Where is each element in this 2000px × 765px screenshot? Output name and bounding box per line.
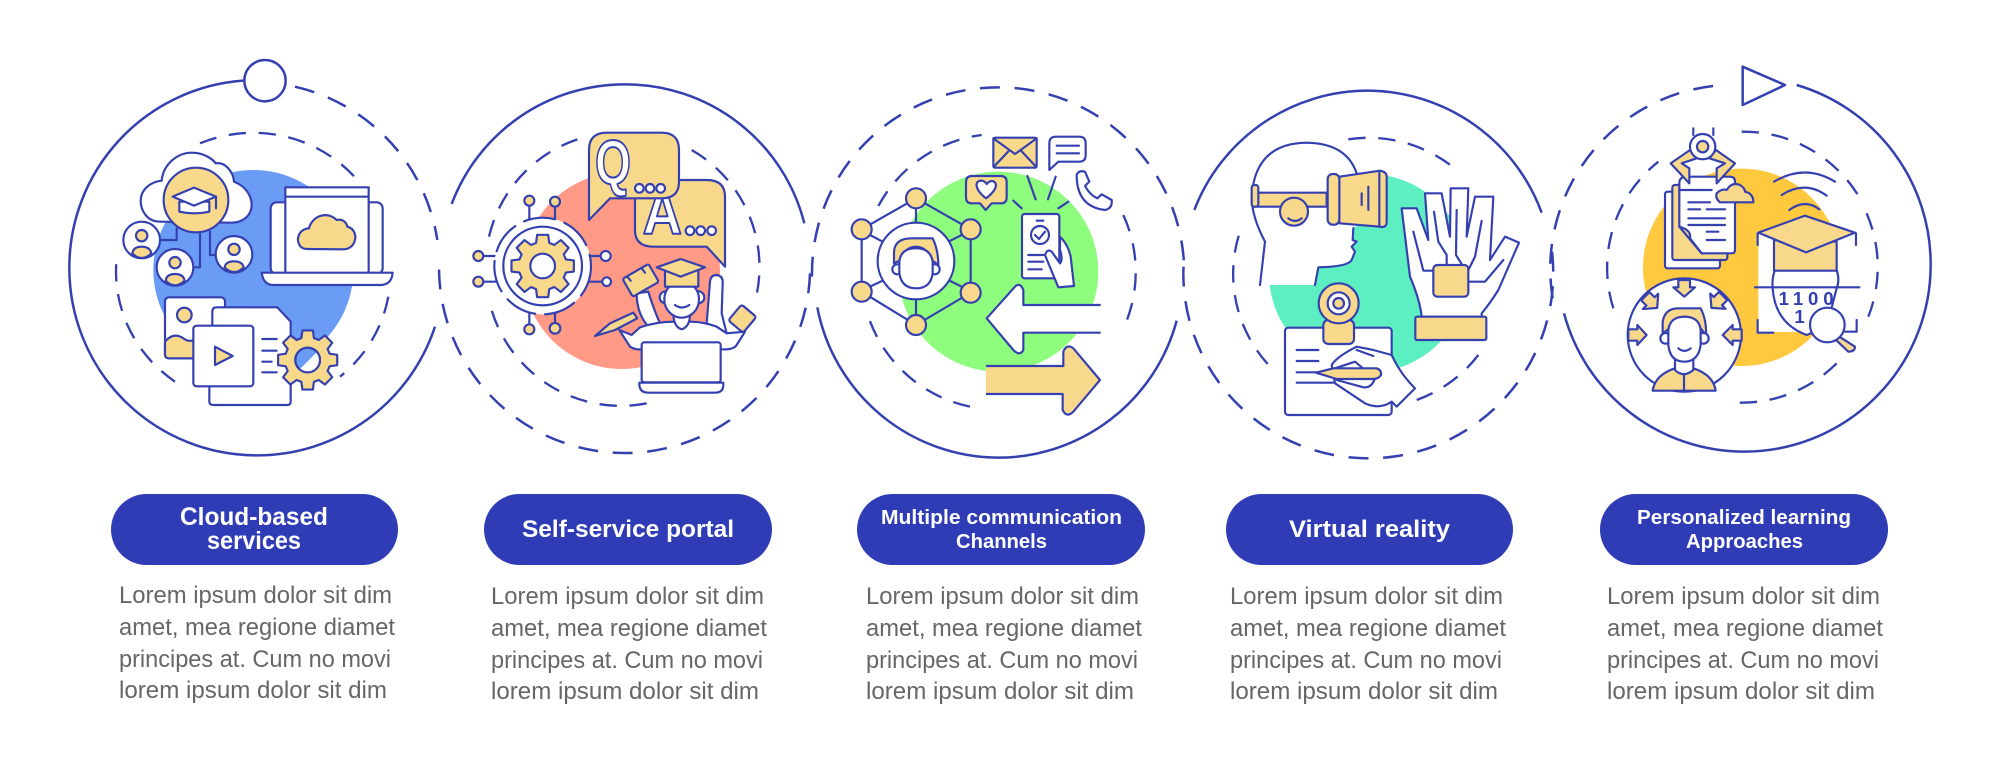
- title pill: Cloud-based services: services: [207, 527, 301, 555]
- body text 1: amet, mea regione diamet: [119, 614, 395, 641]
- body text 4: Lorem ipsum dolor sit dim: [1230, 583, 1503, 610]
- arrow: right: [986, 346, 1100, 415]
- outer ring: [69, 60, 437, 455]
- icon: media files and gear: [165, 297, 337, 405]
- title pill: Self-service portal: Self-service portal: [522, 516, 734, 543]
- body text 3: principes at. Cum no movi: [866, 647, 1138, 674]
- body text 5: principes at. Cum no movi: [1607, 647, 1879, 674]
- icon: graduation cap with binary and magnifier: 1: [1794, 306, 1805, 327]
- icon: question bubble: Q: [595, 128, 631, 198]
- title pill: Virtual reality: [1226, 494, 1513, 565]
- icon: phone in hand: [1013, 176, 1074, 287]
- outer ring: [439, 84, 810, 453]
- body text 3: Lorem ipsum dolor sit dim: [866, 583, 1139, 610]
- title pill: Cloud-based services: Cloud-based: [180, 503, 328, 531]
- inner dashed ring: [116, 133, 388, 382]
- body text 1: lorem ipsum dolor sit dim: [119, 677, 387, 704]
- title pill: Cloud-based services: [111, 494, 398, 565]
- inner dashed ring: [489, 139, 759, 406]
- body text 1: Lorem ipsum dolor sit dim: [119, 582, 392, 609]
- blue background disc: [153, 170, 353, 370]
- body text 4: principes at. Cum no movi: [1230, 647, 1502, 674]
- icon: answer bubble: [635, 179, 725, 267]
- outer ring: [812, 87, 1184, 458]
- inner dashed ring: [1233, 138, 1478, 400]
- inner dashed ring: [1607, 132, 1878, 403]
- icon: graduation cap with binary and magnifier: [1755, 172, 1859, 352]
- panel: virtual reality: [1183, 91, 1553, 705]
- icon: circuit gear: [473, 196, 611, 334]
- end marker triangle: [1743, 67, 1785, 105]
- body text 1: principes at. Cum no movi: [119, 646, 391, 673]
- icon: documents with robot arm and cloud: [1665, 128, 1753, 268]
- body text 4: lorem ipsum dolor sit dim: [1230, 678, 1498, 705]
- title pill: Multiple communication Channels: Channels: [956, 531, 1047, 553]
- panel: personalized learning approaches: [1550, 67, 1931, 705]
- panel: cloud-based services: [69, 60, 437, 704]
- body text 3: [866, 583, 1142, 705]
- body text 2: Lorem ipsum dolor sit dim: [491, 583, 764, 610]
- icon: answer bubble: A: [643, 179, 682, 248]
- panel 1 circle and icons: [69, 60, 437, 455]
- body text 2: amet, mea regione diamet: [491, 615, 767, 642]
- title pill: Virtual reality: Virtual reality: [1289, 516, 1451, 543]
- title pill: Personalized learning Approaches: Personalized learning: [1637, 507, 1851, 529]
- title pill: Self-service portal: [484, 494, 772, 565]
- body text 2: principes at. Cum no movi: [491, 647, 763, 674]
- icon: envelope: [993, 138, 1037, 168]
- panel: self-service portal: [439, 84, 810, 705]
- teal background disc: [1269, 174, 1468, 373]
- body text 2: [491, 583, 767, 705]
- salmon background disc: [523, 172, 720, 369]
- panel 3 circle and icons: [812, 87, 1184, 458]
- title pill: Personalized learning Approaches: Approaches: [1686, 531, 1803, 553]
- icon: person with focus arrows: [1628, 278, 1742, 392]
- body text 3: amet, mea regione diamet: [866, 615, 1142, 642]
- inner dashed ring: [868, 135, 1136, 407]
- body text 5: amet, mea regione diamet: [1607, 615, 1883, 642]
- green background disc: [898, 172, 1098, 372]
- panel: multiple communication channels: [812, 87, 1184, 705]
- body text 4: [1230, 583, 1506, 705]
- body text 4: amet, mea regione diamet: [1230, 615, 1506, 642]
- body text 5: Lorem ipsum dolor sit dim: [1607, 583, 1880, 610]
- icon: laptop with cloud: [262, 187, 393, 285]
- icon: cloud with graduation cap: [141, 153, 252, 267]
- outer ring: [1183, 91, 1553, 458]
- panel 2 circle and icons: [439, 84, 810, 453]
- icon: telephone handset: [1077, 171, 1112, 210]
- icon: multitasking student at laptop: [595, 259, 756, 393]
- icon: network with user: [852, 188, 981, 335]
- title pill: Personalized learning Approaches: [1600, 494, 1888, 565]
- body text 3: lorem ipsum dolor sit dim: [866, 678, 1134, 705]
- body text 5: [1607, 583, 1883, 705]
- yellow background disc: [1643, 169, 1840, 366]
- icon: chat bubble: [1049, 137, 1086, 170]
- icon: sensor glove: [1402, 188, 1519, 340]
- body text 1: [119, 582, 395, 704]
- outer ring: [1550, 85, 1931, 452]
- panel 5 circle and icons: [1550, 67, 1931, 452]
- arrow: left: [987, 285, 1101, 353]
- icon: head with VR headset: [1247, 143, 1387, 285]
- body text 2: lorem ipsum dolor sit dim: [491, 678, 759, 705]
- icon: writing on notepad with webcam: [1285, 283, 1415, 415]
- icon: graduation cap with binary and magnifier: 1100: [1779, 288, 1834, 309]
- icon: three learners: [123, 222, 252, 286]
- icon: question bubble: [589, 128, 679, 220]
- title pill: Multiple communication Channels: [857, 494, 1145, 565]
- body text 5: lorem ipsum dolor sit dim: [1607, 678, 1875, 705]
- panel 4 circle and icons: [1183, 91, 1553, 458]
- title pill: Multiple communication Channels: Multiple communication: [881, 507, 1122, 529]
- icon: heart bubble: [966, 176, 1007, 210]
